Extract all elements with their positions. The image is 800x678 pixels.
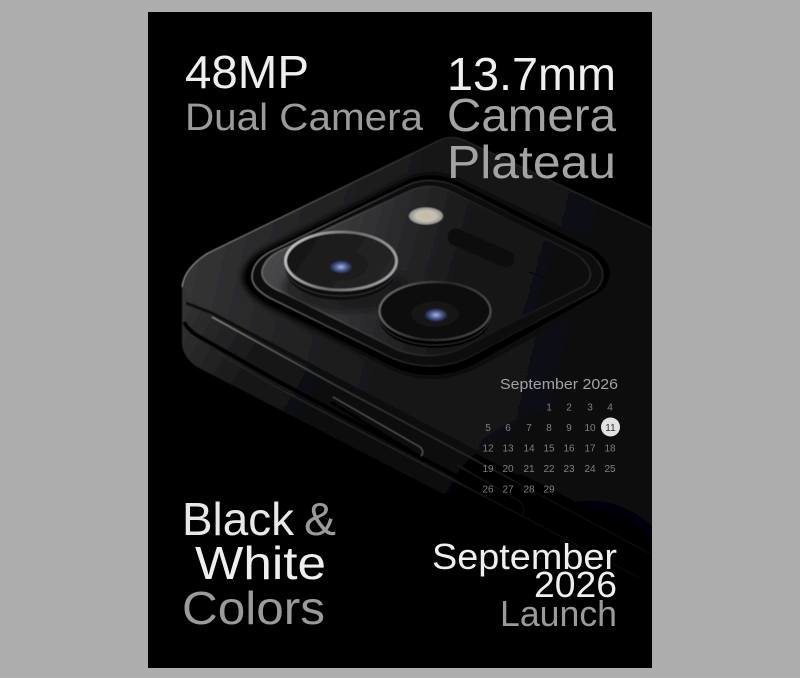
- camera lens lower: [379, 282, 491, 348]
- calendar dates: 16: [563, 444, 575, 454]
- headline: Black & White Colors: Colors: [182, 582, 325, 634]
- calendar dates: 28: [523, 484, 535, 496]
- calendar dates: 9: [566, 423, 572, 434]
- calendar heading: September 2026: [500, 376, 618, 393]
- headline: 48MP Dual Camera: [185, 46, 424, 139]
- calendar dates: 2: [566, 402, 572, 414]
- poster background: [148, 12, 652, 668]
- calendar dates: 1: [546, 402, 552, 414]
- phone side band: [182, 288, 646, 578]
- calendar dates: 15: [543, 444, 555, 454]
- headline: 13.7mm Camera Plateau: Camera: [447, 89, 616, 141]
- calendar dates: 18: [604, 444, 616, 454]
- headline: 13.7mm Camera Plateau: 13.7mm: [447, 48, 616, 100]
- calendar dates: 25: [604, 464, 616, 475]
- calendar dates: 21: [523, 464, 535, 475]
- calendar: [482, 376, 620, 496]
- headline: September 2026 Launch: [432, 536, 617, 634]
- calendar dates: 8: [546, 423, 552, 434]
- phone edge highlights: [212, 317, 660, 559]
- sensor pill: [456, 237, 506, 259]
- microphone: [529, 272, 544, 278]
- headline: 48MP Dual Camera: 48MP: [185, 46, 309, 98]
- calendar dates: 7: [526, 423, 532, 434]
- volume button: [333, 397, 423, 456]
- calendar dates: 17: [584, 444, 596, 454]
- calendar dates: 3: [587, 402, 593, 414]
- calendar dates: 23: [563, 464, 575, 475]
- headline: 13.7mm Camera Plateau: Plateau: [447, 136, 616, 188]
- flash: [409, 208, 443, 224]
- calendar dates: 22: [543, 464, 555, 475]
- headline: Black & White Colors: Black: [182, 493, 295, 545]
- calendar dates: 6: [505, 423, 511, 434]
- calendar dates: 24: [584, 464, 596, 475]
- calendar dates: 26: [482, 484, 494, 496]
- phone back face: [182, 137, 660, 548]
- calendar dates: 19: [482, 464, 494, 475]
- calendar dates: [482, 402, 616, 496]
- lens shadow: [281, 272, 408, 314]
- calendar dates: 12: [482, 444, 494, 454]
- camera plateau shadow: [242, 173, 611, 377]
- camera plateau: [252, 180, 603, 366]
- highlighted date 11: 11: [605, 423, 616, 434]
- headline: Black & White Colors: &: [304, 493, 336, 545]
- calendar dates: 20: [502, 464, 514, 475]
- calendar dates: 5: [485, 423, 491, 434]
- camera lens upper: [285, 232, 397, 300]
- headline: Black & White Colors: [182, 493, 336, 634]
- calendar dates: 14: [523, 444, 535, 454]
- calendar dates: 27: [502, 484, 514, 496]
- phone illustration: [180, 136, 652, 578]
- calendar dates: 29: [543, 484, 555, 496]
- headline: 13.7mm Camera Plateau: [447, 48, 616, 188]
- headline: September 2026 Launch: Launch: [500, 593, 617, 634]
- calendar dates: 4: [607, 402, 613, 414]
- headline: Black & White Colors: White: [195, 537, 326, 589]
- calendar dates: 13: [502, 444, 514, 454]
- side slot: [457, 465, 524, 515]
- calendar dates: 10: [584, 423, 596, 434]
- headline: September 2026 Launch: 2026: [534, 564, 617, 605]
- headline: 48MP Dual Camera: Dual Camera: [185, 97, 424, 139]
- lower body fade: [440, 410, 652, 579]
- headline: September 2026 Launch: September: [432, 536, 617, 577]
